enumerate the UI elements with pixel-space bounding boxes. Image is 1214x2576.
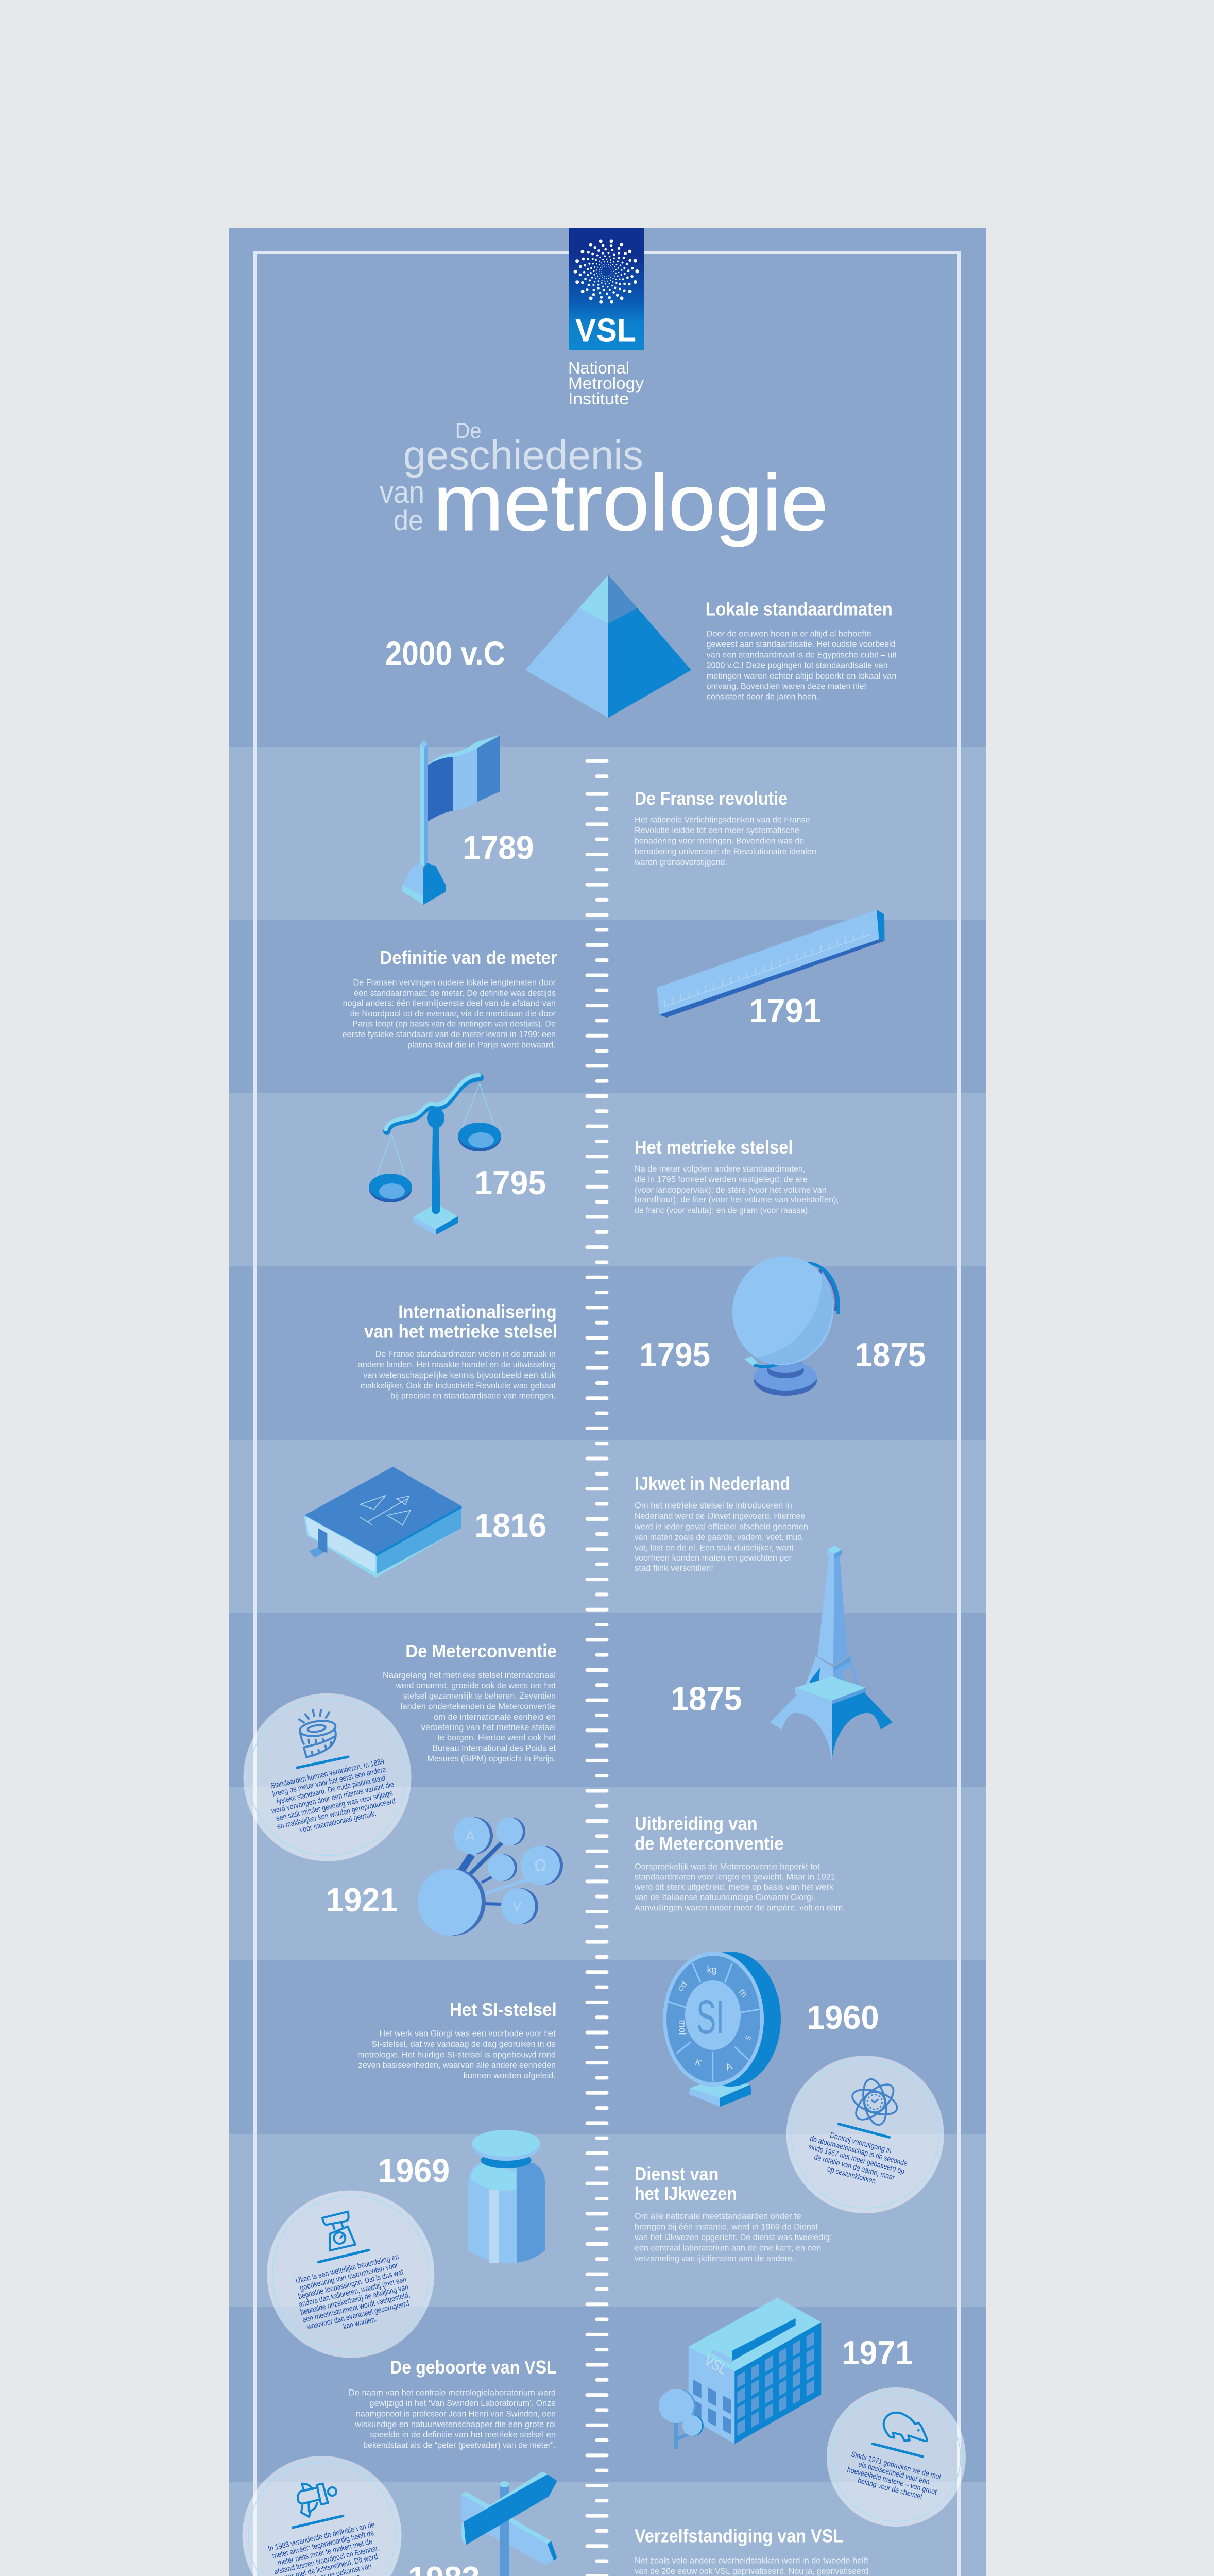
text block: Lokale standaardmaten: consistent door de jaren heen. [707, 692, 819, 702]
callout: weighing scale: een meetinstrument wordt vastgesteld, [302, 2291, 411, 2325]
callout: speed of light: afstand tussen Noordpool en Evenaar, [273, 2544, 380, 2576]
text block: De Franse revolutie: benadering voor metingen. Bovendien was de [635, 837, 804, 846]
text block: De Franse revolutie: Revolutie leidde tot een meer systematische [635, 826, 799, 835]
text block: Het metrieke stelsel: Het metrieke stelsel [635, 1137, 793, 1158]
callout: speed of light [242, 2456, 402, 2576]
text block: Lokale standaardmaten: metingen waren echter altijd beperkt en lokaal van [707, 671, 897, 681]
icon: Eiffel tower [770, 1546, 893, 1761]
text block: Het SI-stelsel: SI-stelsel, dat we vandaag de dag gebruiken in de [371, 2040, 556, 2049]
text block: IJkwet in Nederland: werd in ieder geval officieel afscheid genomen [634, 1522, 808, 1531]
icon: SI molecule [418, 1817, 563, 1936]
icon: pyramid [525, 575, 691, 718]
title: metrologie [433, 458, 828, 547]
text block: Lokale standaardmaten: 2000 v.C.! Deze pogingen tot standaardisatie van [707, 660, 888, 670]
icon: SI wheel: A [724, 2061, 733, 2073]
text block: De Meterconventie: stelsel gezamenlijk te beheren. Zeventien [403, 1691, 556, 1701]
callout: tape measure: werd vervangen door een nieuwe variant die [270, 1780, 395, 1816]
year: 1969: 1969 [378, 2152, 450, 2190]
text block: De Franse revolutie: De Franse revolutie [635, 788, 788, 809]
callout: atomic clock: de rotatie van de aarde, maar [813, 2153, 896, 2182]
year: 1875: 1875 [671, 1680, 742, 1717]
callout: atomic clock: op cesiumklokken. [826, 2165, 878, 2186]
text block: Internationalisering: makkelijker. Ook de Industriële Revolutie was gebaat [361, 1381, 556, 1391]
text block: Uitbreiding van de Meterconventie: van de Italiaanse natuurkundige Giovanni Giorgi. [635, 1893, 815, 1902]
text block: Verzelfstandiging van VSL: Verzelfstandiging van VSL [635, 2526, 843, 2547]
year: 1789: 1789 [463, 828, 534, 867]
callout: tape measure: en makkelijker kon worden gereproduceerd [276, 1797, 396, 1831]
year: 1816: 1816 [474, 1506, 546, 1544]
logo caption: National [568, 359, 629, 377]
text block: Lokale standaardmaten: Door de eeuwen heen is er altijd al behoefte [707, 630, 871, 639]
text block: Lokale standaardmaten: Lokale standaardmaten [706, 599, 893, 620]
text block: Verzelfstandiging van VSL [635, 2526, 868, 2576]
text block: De Meterconventie [383, 1640, 557, 1764]
text block: IJkwet in Nederland: Om het metrieke stelsel te introduceren in [635, 1501, 792, 1511]
text block: Definitie van de meter: Parijs loopt (op basis van de metingen van destijds). De [352, 1020, 556, 1029]
callout: tape measure: kreeg de meter voor het eerst een andere [271, 1765, 387, 1799]
text block: De Meterconventie: Mesures (BIPM) opgericht in Parijs. [428, 1754, 556, 1764]
building windows: left face [693, 2380, 731, 2434]
callout: weighing scale: waarvoor dan eventueel gecorrigeerd [306, 2299, 410, 2332]
year: 1960: 1960 [807, 1998, 879, 2036]
callout: mole: hoeveelheid materie – van groot [846, 2465, 938, 2497]
year: 1921: 1921 [326, 1881, 398, 1919]
callout: tape measure: fysieke standaard. De oude platina staaf [276, 1773, 387, 1806]
text block: IJkwet in Nederland: Nederland werd de IJkwet ingevoerd. Hiermee [635, 1512, 805, 1521]
icon: SI wheel: mol [677, 2020, 688, 2035]
text block: Internationalisering: van wetenschappelijke kennis bijvoorbeeld een stuk [363, 1370, 556, 1380]
callout: mole [827, 2387, 966, 2527]
logo caption: Metrology [568, 374, 644, 393]
text block: Dienst van het IJkwezen: van het IJkwezen opgericht. De dienst was tweeledig: [635, 2233, 832, 2242]
icon: kitchen scale [322, 2212, 355, 2250]
text block: Internationalisering: Internationalisering [398, 1301, 557, 1322]
text block: Het metrieke stelsel: (voor landoppervlak); de stère (voor het volume van [635, 1185, 827, 1195]
text block: De geboorte van VSL: De geboorte van VSL [390, 2357, 557, 2378]
icon: signpost [461, 2471, 557, 2576]
text block: Internationalisering [358, 1301, 557, 1401]
text block: Het SI-stelsel: Het werk van Giorgi was een voorbode voor het [379, 2029, 556, 2039]
text block: Lokale standaardmaten [706, 599, 897, 702]
text block: Dienst van het IJkwezen: brengen bij één instantie, werd in 1969 de Dienst [635, 2223, 818, 2232]
callout: atomic clock: sinds 1967 niet meer gebaseerd op [808, 2143, 905, 2176]
text block: Het metrieke stelsel: brandhout); de liter (voor het volume van vloeistoffen); [635, 1195, 839, 1205]
text block: Uitbreiding van de Meterconventie: Aanvullingen waren onder meer de ampère, volt en ohm. [635, 1903, 845, 1912]
text block: Dienst van het IJkwezen: het IJkwezen [635, 2183, 737, 2204]
text block: De geboorte van VSL: De naam van het centrale metrologielaboratorium werd [349, 2388, 556, 2398]
text block: Uitbreiding van de Meterconventie: Oorspronkelijk was de Meterconventie beperkt tot [635, 1862, 820, 1872]
icon: atom clock [849, 2077, 900, 2127]
icon: globe [724, 1248, 842, 1396]
text block: Het SI-stelsel [357, 1999, 557, 2080]
text block: Internationalisering: van het metrieke stelsel [364, 1321, 557, 1342]
text block: Definitie van de meter: Definitie van de meter [380, 947, 557, 968]
callout: mole: als basiseenheid voor een [858, 2460, 930, 2486]
icon: VSL building [659, 2298, 821, 2449]
building windows: right face [737, 2332, 814, 2436]
text block: Het metrieke stelsel [635, 1137, 839, 1215]
text block: Uitbreiding van de Meterconventie: Uitbreiding van [635, 1813, 758, 1834]
icon: VSL building: VSL [702, 2351, 730, 2378]
text block: Internationalisering: bij precisie en standaardisatie van metingen. [390, 1392, 556, 1401]
icon: SI wheel: cd [675, 1979, 689, 1993]
logo caption [568, 359, 644, 408]
text block: Definitie van de meter: platina staaf die in Parijs werd bewaard. [407, 1041, 556, 1050]
callout: weighing scale: goedkeuring van instrumenten voor [299, 2261, 399, 2293]
timeline ruler ticks [587, 761, 607, 2576]
text block: De Franse revolutie [634, 788, 816, 867]
callout: atomic clock: Dankzij vooruitgang in [829, 2131, 893, 2155]
logo caption: Institute [568, 389, 629, 408]
white frame [255, 252, 959, 2576]
text block: Verzelfstandiging van VSL: Net zoals vele andere overheidstakken werd in de tweede helft [635, 2556, 868, 2566]
title: de [394, 504, 423, 536]
text block: De geboorte van VSL: wiskundige en natuurwetenschapper die een grote rol [354, 2420, 556, 2429]
text block: De Franse revolutie: waren grensoverstijgend. [634, 857, 727, 867]
text block: Definitie van de meter [343, 947, 557, 1050]
text block: Definitie van de meter: nogal anders: één tienmiljoenste deel van de afstand van [343, 999, 556, 1008]
text block: IJkwet in Nederland: van maten zoals de gaarde, vadem, voet, mud, [635, 1533, 804, 1542]
year: 1791: 1791 [749, 992, 821, 1029]
text block: Uitbreiding van de Meterconventie: werd dit sterk uitgebreid, mede op basis van het werk [634, 1883, 834, 1892]
text block: Uitbreiding van de Meterconventie: standaardmaten voor lengte en gewicht. Maar in 1921 [635, 1872, 835, 1882]
text block: Het SI-stelsel: kunnen worden afgeleid. [464, 2071, 556, 2080]
text block: Het SI-stelsel: metrologie. Het huidige SI-stelsel is opgebouwd rond [357, 2050, 556, 2059]
icon: mole [884, 2413, 927, 2441]
icon: SI molecule: V [512, 1899, 522, 1914]
text block: Het SI-stelsel: zeven basiseenheden, waarvan alle andere eenheden [358, 2061, 556, 2070]
text block: Dienst van het IJkwezen: een centraal laboratorium aan de ene kant, en een [635, 2243, 821, 2252]
callout: weighing scale: bepaalde toepassingen. Dat is dus wat [297, 2267, 404, 2301]
text block: Definitie van de meter: één standaardmaat: de meter. De definitie was destijds [354, 989, 556, 998]
callout: atomic clock [786, 2056, 944, 2213]
callout: speed of light: meter alwéér: tegenwoordig heeft de [271, 2529, 375, 2561]
text block: De geboorte van VSL: bekendstaat als de “peter (peetvader) van de meter”. [363, 2441, 556, 2450]
title: van [380, 475, 424, 510]
text block: Dienst van het IJkwezen: Dienst van [635, 2163, 719, 2184]
text block: Dienst van het IJkwezen [635, 2163, 832, 2263]
callout: weighing scale: anders dan kalibreren, waarbij (met een [298, 2275, 407, 2309]
text block: De Meterconventie: landen ondertekenden de Meterconventie [401, 1702, 556, 1711]
year: 1971: 1971 [842, 2334, 913, 2371]
text block: Lokale standaardmaten: omvang. Bovendien waren deze maten niet [707, 682, 866, 691]
text block: Definitie van de meter: De Fransen vervingen oudere lokale lengtematen door [353, 978, 556, 987]
icon: balance scale [369, 1075, 501, 1235]
text block: IJkwet in Nederland: IJkwet in Nederland [635, 1473, 790, 1494]
callout: tape measure: Standaarden kunnen veranderen. In 1889 [270, 1757, 385, 1790]
text block: De Meterconventie: Naargelang het metrieke stelsel internationaal [383, 1671, 556, 1680]
icon: tape measure [299, 1710, 336, 1757]
year: 2000 v.C: 2000 v.C [385, 635, 505, 672]
text block: Lokale standaardmaten: geweest aan standaardisatie. Het oudste voorbeeld [707, 640, 896, 649]
text block: IJkwet in Nederland: vat, last en de el. Een stuk duidelijker, want [635, 1543, 794, 1552]
VSL logo [569, 228, 644, 350]
text block: Internationalisering: andere landen. Het maakte handel en de uitwisseling [358, 1360, 556, 1369]
icon: ruler [657, 910, 885, 1018]
text block: IJkwet in Nederland: voorheen konden maten en gewichten per [635, 1553, 792, 1563]
text block: De geboorte van VSL: speelde in de definitie van het metrieke stelsel en [370, 2430, 556, 2439]
icon: kilogram weight [468, 2130, 545, 2263]
text block: Dienst van het IJkwezen: Om alle nationale meetstandaarden onder te [635, 2212, 801, 2221]
icon: SI molecule: Ω [534, 1856, 546, 1875]
callout: atomic clock: de atoomwetenschap is de seconde [809, 2134, 909, 2168]
icon: SI molecule: A [466, 1828, 475, 1844]
main panel [229, 228, 986, 2576]
text block: Definitie van de meter: eerste fysieke standaard van de meter kwam in 1799: een [343, 1030, 556, 1039]
VSL logo: VSL [575, 313, 636, 349]
text block: De Meterconventie: om de internationale eenheid en [434, 1713, 556, 1722]
icon: SI wheel: kg [707, 1964, 717, 1975]
icon: laser [298, 2484, 336, 2517]
callout: mole: Sinds 1971 gebruiken we de mol [850, 2450, 942, 2481]
text block: Het SI-stelsel: Het SI-stelsel [450, 1999, 557, 2020]
icon: SI wheel: SI [696, 1990, 724, 2044]
callout: speed of light: meter niets meer te maken met de [277, 2537, 373, 2567]
text block: Uitbreiding van de Meterconventie [634, 1813, 845, 1912]
callout: speed of light: In 1983 veranderde de definitie van de [267, 2520, 375, 2553]
text block: De Franse revolutie: Het rationele Verlichtingsdenken van de Franse [635, 816, 810, 825]
callout: tape measure: een stuk minder gevoelig was voor slijtage [275, 1789, 394, 1823]
icon: book [304, 1467, 461, 1578]
text block: Internationalisering: De Franse standaardmaten vielen in de smaak in [375, 1350, 556, 1359]
text block: Het metrieke stelsel: Na de meter volgden andere standaardmaten, [635, 1164, 805, 1174]
alternating timeline bands [229, 747, 986, 2576]
callout: weighing scale: bepaalde onzekerheid) de afwijking van [300, 2283, 409, 2317]
logo dot spiral [575, 241, 637, 302]
text block: IJkwet in Nederland: stad flink verschillen! [635, 1564, 713, 1573]
icon: French flag [402, 735, 500, 905]
text block: De geboorte van VSL [349, 2357, 557, 2450]
text block: De Meterconventie: De Meterconventie [405, 1640, 557, 1662]
callout: mole: belang voor de chemie! [857, 2476, 924, 2501]
text block: Lokale standaardmaten: van een standaardmaat is de Egyptische cubit – uit [707, 650, 897, 659]
callout: weighing scale: kan worden. [343, 2315, 378, 2331]
icon: SI wheel: m [737, 1987, 750, 1999]
callout: tape measure [243, 1693, 411, 1861]
text block: Uitbreiding van de Meterconventie: de Meterconventie [635, 1833, 784, 1854]
text block: De Franse revolutie: benadering universeel: de Revolutionaire idealen [635, 847, 816, 856]
icon: SI wheel: s [742, 2033, 753, 2042]
title: De [455, 418, 482, 443]
text block: De Meterconventie: Bureau International des Poids et [432, 1743, 556, 1753]
title: geschiedenis [403, 432, 643, 478]
text block: Het metrieke stelsel: die in 1795 formeel werden vastgelegd: de are [635, 1175, 808, 1184]
text block: IJkwet in Nederland [634, 1473, 808, 1573]
text block: Het metrieke stelsel: de franc (voor valuta); en de gram (voor massa). [635, 1206, 810, 1215]
text block: Definitie van de meter: de Noordpool tot de evenaar, via de meridiaan die door [350, 1009, 556, 1019]
year: 1795: 1795 [639, 1336, 710, 1374]
text block: Dienst van het IJkwezen: verzameling van ijkdiensten aan de andere. [635, 2254, 794, 2263]
callout: tape measure: voor internationaal gebruik. [299, 1809, 377, 1835]
icon: SI wheel [663, 1952, 781, 2107]
text block: De geboorte van VSL: gewijzigd in het ‘Van Swinden Laboratorium’. Onze [370, 2399, 556, 2408]
icon: SI wheel: K [694, 2057, 703, 2069]
text block: De geboorte van VSL: naamgenoot is professor Jean Henri van Swinden, een [356, 2409, 556, 2418]
year: 1795: 1795 [474, 1164, 546, 1201]
text block: De Meterconventie: te borgen. Hiertoe werd ook het [438, 1733, 556, 1742]
text block: De Meterconventie: verbetering van het metrieke stelsel [421, 1723, 556, 1732]
year: 1875: 1875 [854, 1336, 926, 1374]
text block: Verzelfstandiging van VSL: van de 20e eeuw ook VSL geprivatiseerd. Nou ja, geprivatiseerd [635, 2567, 868, 2576]
text block: De Meterconventie: werd omarmd, groeide ook de wens om het [395, 1681, 556, 1690]
callout: weighing scale [267, 2191, 434, 2358]
title [380, 418, 828, 547]
callout: weighing scale: IJken is een wettelijke beoordeling en [295, 2252, 400, 2285]
